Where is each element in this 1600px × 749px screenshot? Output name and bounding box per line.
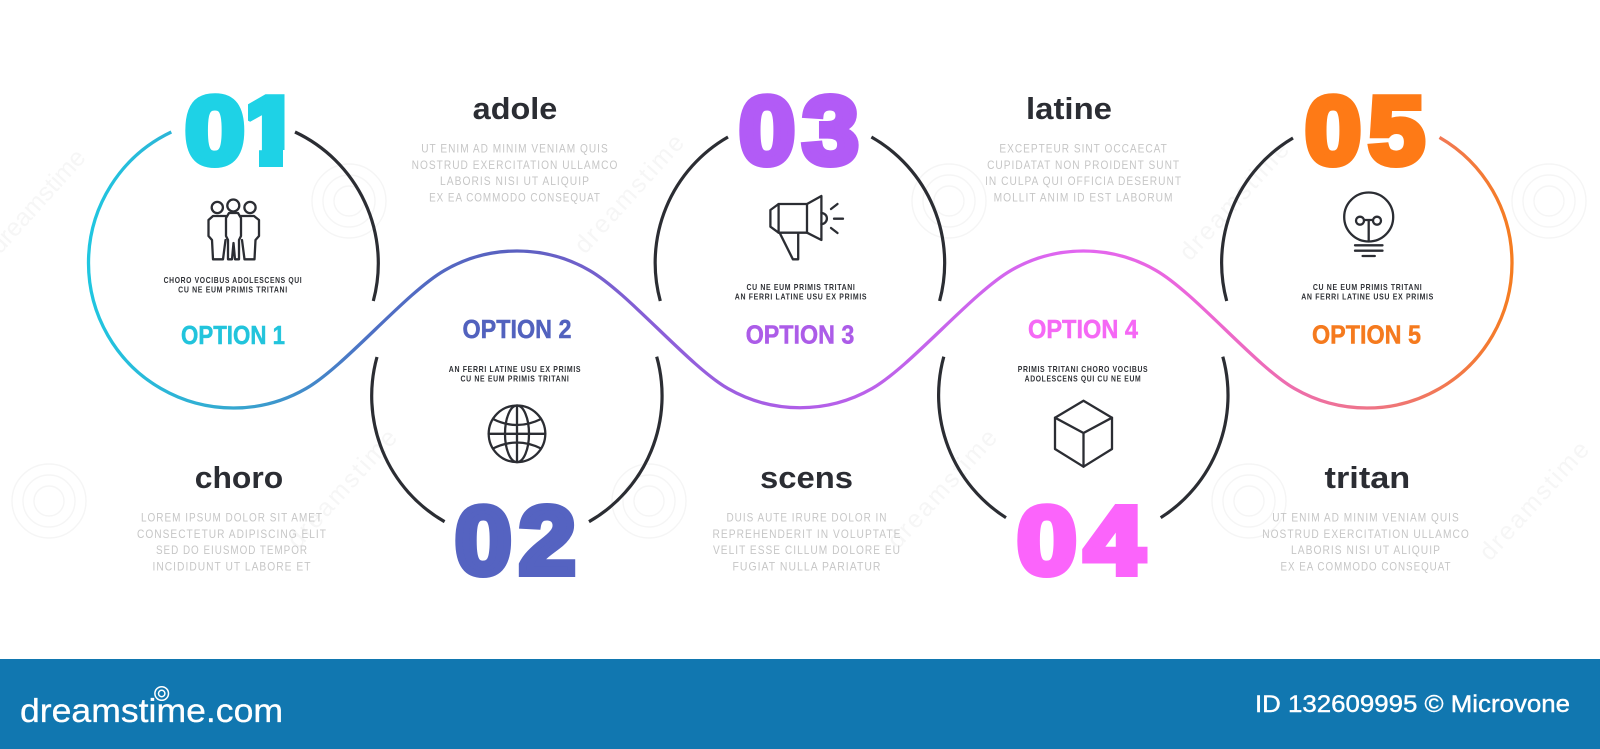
text block: choro bbox=[137, 460, 327, 574]
scens body text: VELIT ESSE CILLUM DOLORE EU bbox=[713, 543, 901, 557]
text: dreamstime bbox=[282, 424, 403, 554]
option 3 description: CU NE EUM PRIMIS TRITANI bbox=[746, 282, 856, 292]
icon: logo spiral bbox=[155, 687, 168, 700]
text: dreamstime bbox=[882, 424, 1003, 554]
tritan body text: EX EA COMMODO CONSEQUAT bbox=[1280, 560, 1452, 574]
number 04: 04 bbox=[1017, 488, 1152, 594]
heading: adole: adole bbox=[473, 91, 557, 126]
tritan body text: UT ENIM AD MINIM VENIAM QUIS bbox=[1272, 510, 1460, 524]
heading: scens: scens bbox=[760, 460, 853, 495]
panel: option 5 bbox=[1222, 78, 1434, 349]
option 5 description bbox=[1301, 282, 1434, 302]
text: dreamstime bbox=[1474, 436, 1595, 566]
number 03: 03 bbox=[739, 78, 866, 184]
option 4 description: ADOLESCENS QUI CU NE EUM bbox=[1025, 374, 1141, 384]
panel: option 3 bbox=[655, 78, 945, 349]
label: option 2: OPTION 2 bbox=[462, 314, 572, 344]
choro body text: CONSECTETUR ADIPISCING ELIT bbox=[137, 527, 327, 541]
label: option 1: OPTION 1 bbox=[181, 320, 285, 350]
label: option 5: OPTION 5 bbox=[1312, 319, 1421, 349]
label: option 4: OPTION 4 bbox=[1028, 314, 1138, 344]
option 5 description: AN FERRI LATINE USU EX PRIMIS bbox=[1301, 292, 1434, 302]
latine body text: MOLLIT ANIM ID EST LABORUM bbox=[994, 190, 1174, 204]
choro body text: INCIDIDUNT UT LABORE ET bbox=[152, 560, 312, 574]
option 4 description bbox=[1018, 364, 1148, 384]
number 01 bbox=[185, 77, 310, 184]
footer logo wordmark: dreamstime.com bbox=[20, 692, 283, 729]
circle 4 left arc bbox=[939, 357, 1006, 518]
footer bar bbox=[0, 659, 1600, 749]
icon: light bulb bbox=[1344, 192, 1393, 256]
adole body text: EX EA COMMODO CONSEQUAT bbox=[429, 190, 601, 204]
option 4 description: PRIMIS TRITANI CHORO VOCIBUS bbox=[1018, 364, 1148, 374]
number 02: 02 bbox=[455, 488, 583, 594]
scens body text: REPREHENDERIT IN VOLUPTATE bbox=[712, 527, 902, 541]
icon: cube bbox=[1055, 401, 1112, 467]
latine body text: CUPIDATAT NON PROIDENT SUNT bbox=[987, 158, 1180, 172]
latine body text: EXCEPTEUR SINT OCCAECAT bbox=[999, 142, 1168, 156]
scens body text: FUGIAT NULLA PARIATUR bbox=[732, 560, 882, 574]
footer image id and credit: ID 132609995 © Microvone bbox=[1255, 691, 1570, 718]
text block: scens bbox=[712, 460, 902, 574]
circle 2 left arc bbox=[372, 357, 445, 522]
heading: choro: choro bbox=[195, 460, 283, 495]
panel: option 2 bbox=[372, 314, 662, 594]
text: dreamstime bbox=[1174, 136, 1295, 266]
option 5 description: CU NE EUM PRIMIS TRITANI bbox=[1313, 282, 1422, 292]
panel: option 4 bbox=[939, 314, 1228, 594]
choro body text: SED DO EIUSMOD TEMPOR bbox=[156, 543, 308, 557]
adole body text: NOSTRUD EXERCITATION ULLAMCO bbox=[412, 158, 618, 172]
circle 3 left arc bbox=[655, 137, 728, 301]
option 2 description bbox=[449, 364, 581, 384]
wave line connecting the five circles bbox=[88, 132, 1512, 408]
number 01: 0 bbox=[185, 77, 245, 184]
text block: tritan bbox=[1262, 460, 1470, 574]
icon: megaphone bbox=[770, 196, 843, 259]
scens body text: DUIS AUTE IRURE DOLOR IN bbox=[726, 510, 888, 524]
heading: latine: latine bbox=[1026, 91, 1112, 126]
option 1 description bbox=[164, 275, 302, 294]
adole body text: LABORIS NISI UT ALIQUIP bbox=[440, 174, 590, 188]
circle 2 right arc bbox=[589, 357, 662, 522]
text block: adole bbox=[412, 91, 618, 204]
heading: tritan: tritan bbox=[1325, 460, 1410, 495]
option 3 description: AN FERRI LATINE USU EX PRIMIS bbox=[735, 292, 867, 302]
label: option 3: OPTION 3 bbox=[746, 319, 854, 349]
circle 3 right arc bbox=[871, 137, 945, 301]
text: dreamstime bbox=[569, 129, 690, 259]
number 05: 05 bbox=[1305, 78, 1432, 184]
latine body text: IN CULPA QUI OFFICIA DESERUNT bbox=[985, 174, 1182, 188]
option 2 description: CU NE EUM PRIMIS TRITANI bbox=[460, 374, 570, 384]
circle 1 dark arc bbox=[295, 132, 378, 301]
tritan body text: NOSTRUD EXERCITATION ULLAMCO bbox=[1262, 527, 1470, 541]
option 1 description: CU NE EUM PRIMIS TRITANI bbox=[178, 284, 288, 294]
tritan body text: LABORIS NISI UT ALIQUIP bbox=[1291, 543, 1441, 557]
number 01: 1 bbox=[241, 77, 301, 184]
adole body text: UT ENIM AD MINIM VENIAM QUIS bbox=[421, 142, 609, 156]
latine body text bbox=[985, 142, 1182, 204]
option 2 description: AN FERRI LATINE USU EX PRIMIS bbox=[449, 364, 581, 374]
option 3 description bbox=[735, 282, 867, 302]
icon: people bbox=[208, 200, 259, 259]
choro body text: LOREM IPSUM DOLOR SIT AMET bbox=[141, 510, 323, 524]
circle 4 right arc bbox=[1161, 357, 1228, 518]
adole body text bbox=[412, 142, 618, 204]
panel: option 1 bbox=[164, 77, 378, 350]
choro body text bbox=[137, 510, 327, 574]
circle 5 left arc bbox=[1222, 138, 1293, 301]
tritan body text bbox=[1262, 510, 1470, 574]
option 1 description: CHORO VOCIBUS ADOLESCENS QUI bbox=[164, 275, 302, 285]
scens body text bbox=[712, 510, 902, 574]
icon: globe bbox=[489, 406, 545, 462]
text block: latine bbox=[985, 91, 1182, 204]
